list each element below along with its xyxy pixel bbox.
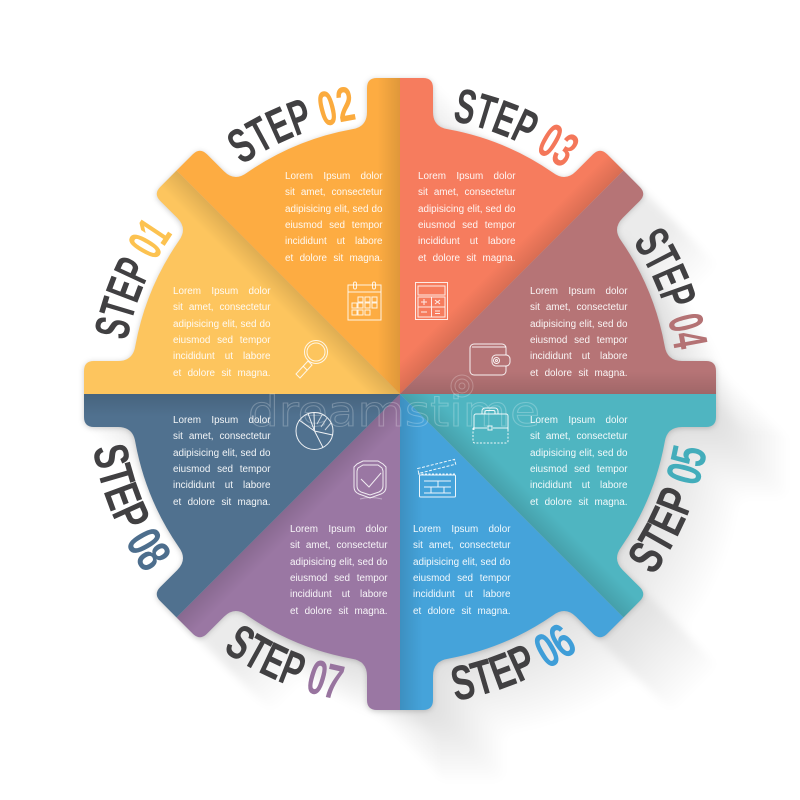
watermark	[248, 375, 540, 436]
icon: clapperboard	[418, 459, 456, 497]
text block: step 02: eiusmod sed tempor	[285, 220, 382, 231]
text block: step 08: sit amet, consectetur	[173, 431, 270, 442]
text block: step 02: incididunt ut labore	[285, 236, 382, 247]
text block: step 03	[418, 171, 516, 264]
text block: step 07: adipisicing elit, sed do	[290, 557, 388, 568]
text block: step 01: sit amet, consectetur	[173, 302, 270, 313]
text block: step 06	[413, 524, 510, 617]
text block: step 02: adipisicing elit, sed do	[285, 204, 382, 215]
text block: step 06: incididunt ut labore	[413, 589, 510, 600]
text block: step 03: et dolore sit magna.	[418, 253, 516, 264]
text block: step 03: adipisicing elit, sed do	[418, 204, 516, 215]
heading: step 01: STEP 01	[96, 220, 172, 338]
text block: step 05: et dolore sit magna.	[530, 497, 628, 508]
text block: step 08: eiusmod sed tempor	[173, 464, 270, 475]
panel: step 07 wedge	[177, 394, 400, 710]
text block: step 04: sit amet, consectetur	[530, 302, 628, 313]
heading: step 08: STEP 08	[94, 444, 170, 570]
text block: step 01: incididunt ut labore	[173, 351, 270, 362]
panel: step 04 wedge	[400, 171, 781, 552]
text block: step 08	[173, 415, 270, 508]
text block: step 08: et dolore sit magna.	[173, 497, 270, 508]
text block: step 04: adipisicing elit, sed do	[530, 319, 628, 330]
icon: calculator	[416, 282, 448, 320]
icon: pie chart	[296, 412, 333, 450]
text block: step 02: et dolore sit magna.	[285, 253, 382, 264]
heading: step 07: STEP 07	[226, 626, 345, 698]
panel: step 06 wedge	[242, 394, 623, 775]
text block: step 07: sit amet, consectetur	[290, 540, 388, 551]
text block: step 03: sit amet, consectetur	[418, 187, 516, 198]
icon: briefcase	[473, 408, 508, 443]
text block: step 04: incididunt ut labore	[530, 351, 628, 362]
panel: step 03 wedge	[400, 78, 623, 394]
text block: step 01: Lorem Ipsum dolor	[173, 286, 270, 297]
text block: step 07: incididunt ut labore	[290, 589, 388, 600]
text block: step 05: Lorem Ipsum dolor	[530, 415, 628, 426]
text block: step 01: et dolore sit magna.	[173, 368, 270, 379]
text block: step 05: sit amet, consectetur	[530, 431, 628, 442]
panel: step 01 wedge	[84, 171, 400, 394]
text block: step 01: eiusmod sed tempor	[173, 335, 270, 346]
panel: step 02 wedge	[177, 13, 558, 394]
text block: step 05	[530, 415, 628, 508]
heading: step 04: STEP 04	[636, 228, 708, 350]
text block: step 06: eiusmod sed tempor	[413, 573, 510, 584]
heading: step 06: STEP 06	[452, 624, 575, 700]
text block: step 03: eiusmod sed tempor	[418, 220, 516, 231]
text block: step 07: et dolore sit magna.	[290, 606, 388, 617]
text block: step 07	[290, 524, 388, 617]
text block: step 08: incididunt ut labore	[173, 480, 270, 491]
panel: step 05 wedge	[400, 394, 716, 617]
icon: calendar	[348, 282, 381, 320]
text block: step 04: Lorem Ipsum dolor	[530, 286, 628, 297]
text block: step 01	[173, 286, 270, 379]
heading: step 02: STEP 02	[228, 87, 356, 162]
heading: step 03: STEP 03	[454, 89, 578, 166]
text block: step 04	[530, 286, 628, 379]
text block: step 07: eiusmod sed tempor	[290, 573, 388, 584]
text block: step 06: adipisicing elit, sed do	[413, 557, 510, 568]
icon: shield with check	[354, 461, 386, 499]
text block: step 06: et dolore sit magna.	[413, 606, 510, 617]
text block: step 04: eiusmod sed tempor	[530, 335, 628, 346]
icon: magnifier	[296, 340, 328, 378]
text block: step 03: Lorem Ipsum dolor	[418, 171, 516, 182]
text block: step 08: adipisicing elit, sed do	[173, 448, 270, 459]
text block: step 05: adipisicing elit, sed do	[530, 448, 628, 459]
text block: step 03: incididunt ut labore	[418, 236, 516, 247]
panel: step 08 wedge	[19, 236, 400, 617]
heading: step 05: STEP 05	[630, 445, 706, 572]
icon: wallet	[470, 344, 510, 375]
text block: step 02	[285, 171, 382, 264]
text block: step 07: Lorem Ipsum dolor	[290, 524, 388, 535]
text block: step 05: incididunt ut labore	[530, 480, 628, 491]
watermark: dreamstime	[248, 387, 540, 436]
text block: step 05: eiusmod sed tempor	[530, 464, 628, 475]
text block: step 06: Lorem Ipsum dolor	[413, 524, 510, 535]
text block: step 06: sit amet, consectetur	[413, 540, 510, 551]
text block: step 08: Lorem Ipsum dolor	[173, 415, 270, 426]
text block: step 04: et dolore sit magna.	[530, 368, 628, 379]
text block: step 02: Lorem Ipsum dolor	[285, 171, 382, 182]
text block: step 01: adipisicing elit, sed do	[173, 319, 270, 330]
text block: step 02: sit amet, consectetur	[285, 187, 382, 198]
